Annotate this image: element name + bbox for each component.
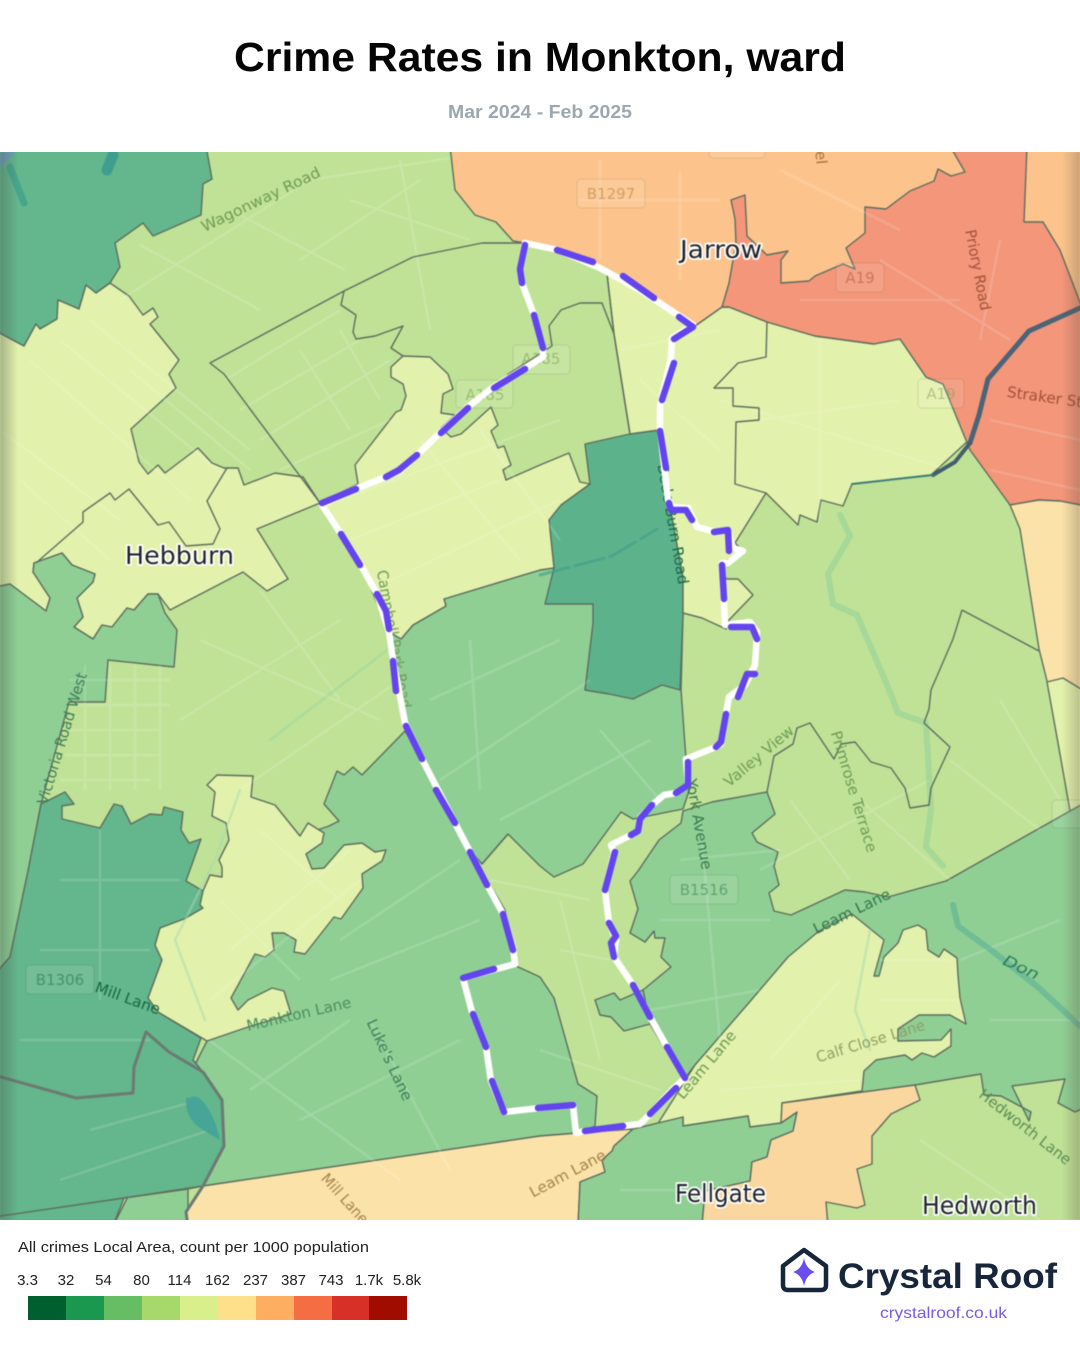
street labels: Bede Burn Road (653, 462, 692, 586)
area: east pale orange (1009, 498, 1080, 688)
area: Jarrow red (722, 146, 1080, 506)
title: Crime Rates in Monkton, ward (234, 34, 846, 80)
road shields: A19 (845, 269, 875, 287)
legend colour scale (28, 1296, 407, 1320)
area: east yellow sliver (1047, 678, 1080, 830)
area: Jarrow orange (450, 146, 1080, 326)
street labels: Priory Road (961, 228, 995, 312)
corner water (0, 152, 16, 168)
purple dashes of boundary (322, 245, 757, 1131)
road shields: B1297 (587, 185, 635, 203)
street labels: Calf Close Lane (814, 1016, 927, 1066)
town labels: Fellgate (675, 1179, 766, 1208)
street labels: Wagonway Road (198, 163, 323, 236)
legend tick labels: 1.7k (355, 1272, 384, 1289)
street labels: Leam Lane (672, 1027, 740, 1103)
area: south-east mid green (630, 792, 1080, 1121)
street labels: Valley View (720, 722, 798, 791)
road shields: A185 (466, 386, 504, 404)
area: Hebburn yellow (0, 283, 320, 639)
area: ward north-west yellow (320, 356, 590, 639)
river Don and streams (10, 155, 1080, 1140)
legend tick labels: 743 (318, 1272, 344, 1289)
legend tick labels: 162 (205, 1272, 230, 1289)
legend tick labels: 5.8k (393, 1272, 422, 1289)
map edge fade (0, 152, 1080, 1220)
logo wordmark: Crystal Roof (838, 1257, 1057, 1296)
street labels: Monkton Lane (245, 993, 353, 1035)
street labels: Leam Lane (810, 885, 894, 938)
area: south-west dark green (0, 792, 224, 1226)
street labels: York Avenue (682, 776, 716, 871)
street labels: Straker St (1006, 383, 1080, 411)
street labels: Mill Lane (93, 978, 163, 1018)
legend tick labels (17, 1272, 422, 1289)
legend title: All crimes Local Area, count per 1000 population (18, 1239, 369, 1256)
town labels: Hebburn (125, 541, 234, 570)
street labels: Primrose Terrace (827, 729, 881, 854)
lower-left thin boundary (0, 1189, 188, 1217)
county boundary (0, 1032, 224, 1226)
legend tick labels: 54 (95, 1272, 112, 1289)
area: east yellow (607, 274, 970, 629)
area: Fellgate pale orange (702, 1085, 920, 1226)
icon: house with star (783, 1250, 826, 1290)
legend (17, 1239, 422, 1320)
road shields: B1516 (680, 881, 728, 899)
legend tick labels: 80 (133, 1272, 150, 1289)
town labels: Jarrow (678, 235, 762, 264)
town labels (125, 235, 1037, 1220)
area: south-west yellow (148, 775, 386, 1041)
street labels: el (811, 150, 831, 165)
legend tick labels: 114 (168, 1272, 191, 1289)
street labels: Mill Lane (317, 1170, 372, 1228)
area: small mid green pocket (595, 990, 650, 1031)
street labels: Victoria Road West (34, 670, 91, 807)
road shields (26, 140, 1080, 994)
internal area boundaries (36, 243, 1039, 864)
legend tick labels: 387 (281, 1272, 306, 1289)
town labels: Hedworth (922, 1191, 1037, 1220)
street labels: Campbell Park Road (373, 569, 415, 710)
white underlay of boundary (322, 243, 757, 1133)
legend tick labels: 3.3 (17, 1272, 38, 1289)
street labels: Don (1000, 951, 1042, 984)
street labels: Leam Lane (526, 1146, 609, 1201)
legend tick labels: 32 (58, 1272, 74, 1289)
street labels: Hedworth Lane (975, 1085, 1075, 1169)
logo url: crystalroof.co.uk (880, 1305, 1008, 1322)
road shields: A19 (926, 385, 956, 403)
area: Leam Lane yellow triangle (657, 914, 966, 1127)
subtitle: date range: Mar 2024 - Feb 2025 (448, 102, 632, 122)
area: Monkton Lane mid green (113, 731, 597, 1226)
area: southern pale orange (186, 1129, 633, 1226)
road shields: B1306 (36, 971, 84, 989)
street labels (34, 150, 1080, 1228)
area: ward dark green block (545, 430, 683, 699)
street labels: Luke's Lane (363, 1016, 416, 1104)
street network (0, 158, 1080, 1220)
road shields: A185 (522, 350, 560, 368)
area: top-left dark green (0, 146, 212, 346)
ward boundary: Monkton (322, 243, 757, 1133)
logo: Crystal Roof (783, 1250, 1057, 1322)
legend tick labels: 237 (243, 1272, 268, 1289)
area: ward central mid green (389, 565, 691, 877)
area: Fellgate mid green (578, 1112, 797, 1226)
area: west mid green (0, 553, 177, 975)
